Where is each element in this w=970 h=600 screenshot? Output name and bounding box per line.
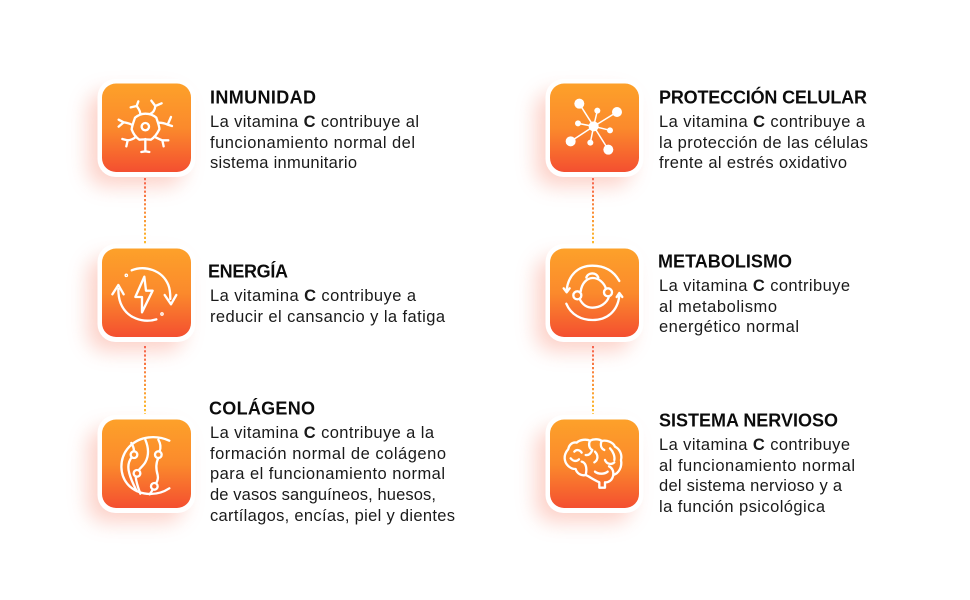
heading: metabolismo: METABOLISMO <box>658 252 792 272</box>
heading: energía: ENERGÍA <box>208 260 288 282</box>
text: metabolismo: La vitamina C contribuye <box>659 277 850 295</box>
text: metabolismo: al metabolismo <box>659 298 777 316</box>
text: protección celular: frente al estrés oxidativo <box>659 154 847 172</box>
text: inmunidad: La vitamina C contribuye al <box>210 113 419 131</box>
icon: collagen fibres <box>121 437 169 494</box>
connector: metabolismo to sistema nervioso <box>592 344 594 414</box>
card: sistema nervioso <box>536 415 644 522</box>
card: colágeno <box>88 415 196 522</box>
text: inmunidad <box>210 113 419 172</box>
panel: metabolismo <box>536 244 850 351</box>
text: colágeno: formación normal de colágeno <box>210 445 446 463</box>
text: protección celular: La vitamina C contribuye a <box>659 113 866 131</box>
text: sistema nervioso: al funcionamiento normal <box>659 457 855 475</box>
card: energía <box>88 244 196 351</box>
text: colágeno <box>210 424 455 525</box>
text: energía: La vitamina C contribuye a <box>210 287 417 305</box>
connector: energía to colágeno <box>144 344 146 414</box>
icon: brain <box>565 439 621 488</box>
text: energía <box>210 287 446 326</box>
card: protección celular <box>536 79 644 186</box>
icon: molecule network <box>566 99 622 155</box>
heading: colágeno: COLÁGENO <box>209 398 315 418</box>
text: sistema nervioso: la función psicológica <box>659 498 826 516</box>
text: energía: reducir el cansancio y la fatiga <box>210 308 446 326</box>
card: inmunidad <box>88 79 196 186</box>
connector: inmunidad to energía <box>144 176 146 246</box>
text: inmunidad: funcionamiento normal del <box>210 134 415 152</box>
text: protección celular: la protección de las células <box>659 134 868 152</box>
panel: inmunidad <box>88 79 419 186</box>
card: metabolismo <box>536 244 644 351</box>
panel: protección celular <box>536 79 868 186</box>
panel: colágeno <box>88 398 455 525</box>
text: sistema nervioso: La vitamina C contribuye <box>659 436 850 454</box>
text: metabolismo: energético normal <box>659 318 799 336</box>
connector dot gaps <box>145 176 593 414</box>
connector: protección celular to metabolismo <box>592 176 594 246</box>
text: colágeno: cartílagos, encías, piel y dientes <box>210 507 455 525</box>
text: sistema nervioso: del sistema nervioso y a <box>659 477 843 495</box>
text: metabolismo <box>659 277 850 336</box>
icon: energy cycle <box>112 268 176 321</box>
text: colágeno: para el funcionamiento normal <box>210 465 445 483</box>
text: sistema nervioso <box>659 436 855 516</box>
heading: sistema nervioso: SISTEMA NERVIOSO <box>659 410 838 430</box>
heading: inmunidad: INMUNIDAD <box>210 88 316 108</box>
text: colágeno: de vasos sanguíneos, huesos, <box>210 486 436 504</box>
heading: protección celular: PROTECCIÓN CELULAR <box>659 86 867 108</box>
icon: metabolic cycle <box>564 266 622 320</box>
text: inmunidad: sistema inmunitario <box>210 154 357 172</box>
panel: energía <box>88 244 446 351</box>
panel: sistema nervioso <box>536 410 855 522</box>
text: colágeno: La vitamina C contribuye a la <box>210 424 435 442</box>
icon: neuron <box>119 101 172 152</box>
text: protección celular <box>659 113 868 172</box>
